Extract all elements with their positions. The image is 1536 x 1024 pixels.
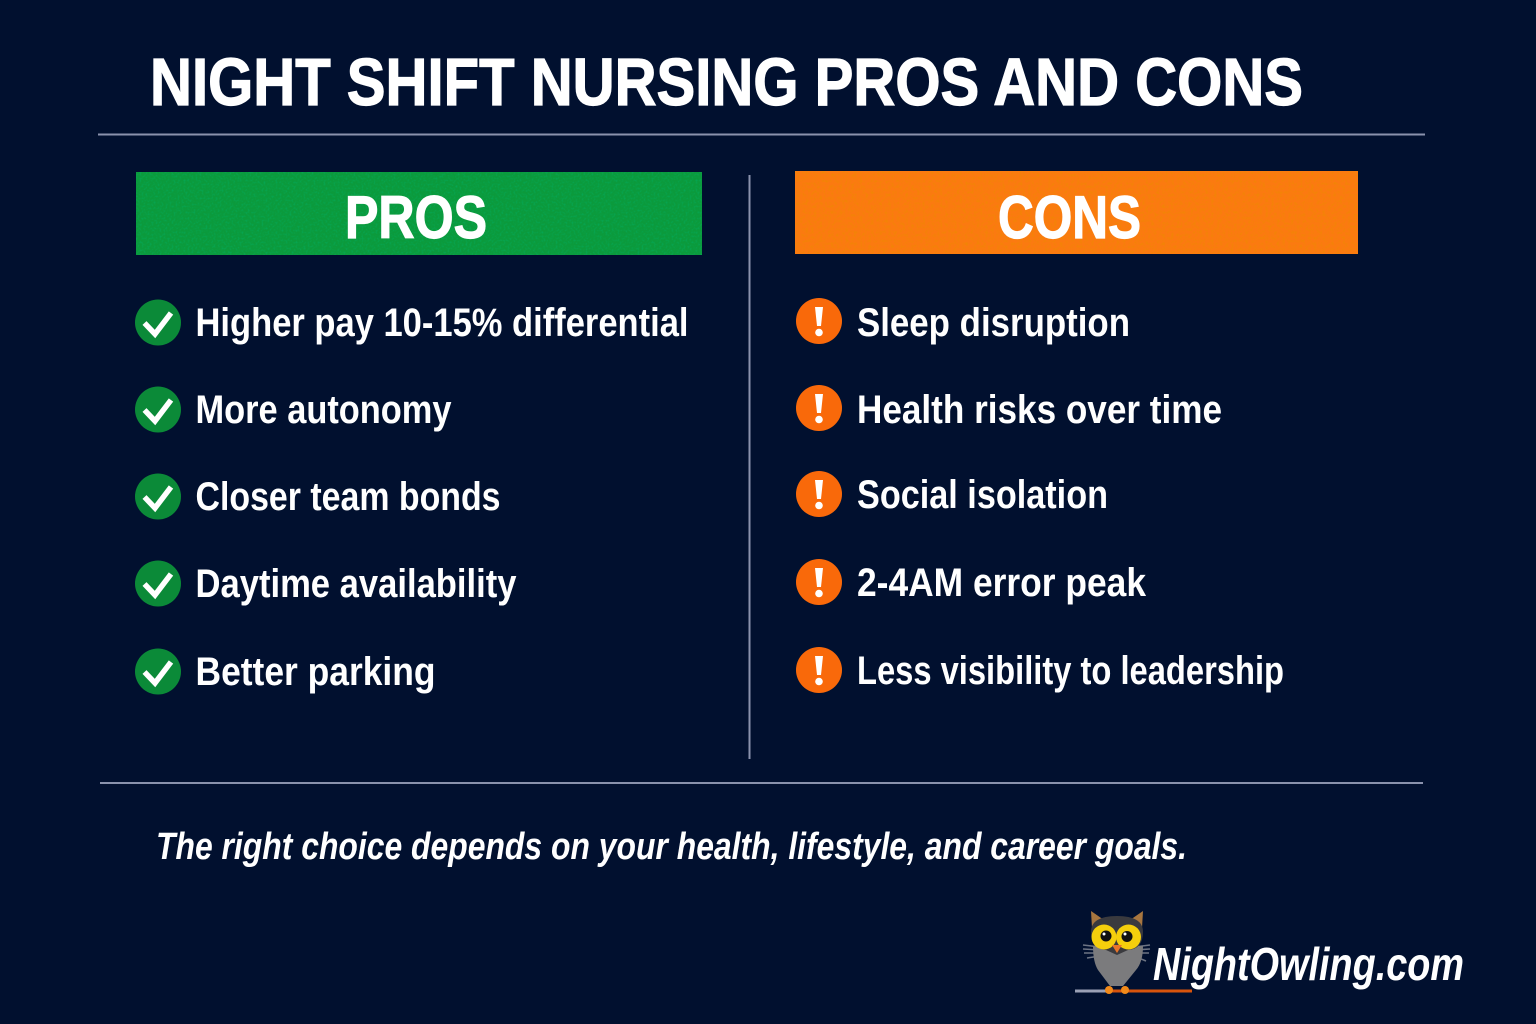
panel: pros <box>135 172 702 694</box>
footer note: The right choice depends on your health, lifestyle, and career goals. <box>156 826 1187 868</box>
con item: social isolation <box>796 471 1108 517</box>
con item: sleep disruption: Sleep disruption <box>857 301 1130 345</box>
cons header <box>795 171 1358 254</box>
logo: NightOwling <box>1075 911 1464 994</box>
con item: error peak: 2-4AM error peak <box>857 561 1147 605</box>
logo: NightOwling: NightOwling.com <box>1153 938 1464 990</box>
pro item: closer team bonds <box>135 474 500 520</box>
pro item: better parking: Better parking <box>196 650 436 694</box>
pro item: higher pay: Higher pay 10-15% differential <box>196 301 688 345</box>
pro item: more autonomy: More autonomy <box>196 388 452 432</box>
title: NIGHT SHIFT NURSING PROS AND CONS <box>150 45 1303 120</box>
con item: sleep disruption <box>796 298 1130 345</box>
pro item: more autonomy <box>135 386 452 432</box>
con item: social isolation: Social isolation <box>857 473 1108 517</box>
cons header: CONS <box>998 184 1141 251</box>
pro item: closer team bonds: Closer team bonds <box>196 475 500 519</box>
con item: less visibility: Less visibility to leadership <box>857 649 1284 693</box>
pro item: better parking <box>135 648 436 694</box>
pros header: PROS <box>345 184 487 251</box>
con item: health risks: Health risks over time <box>857 388 1222 432</box>
icon: owl <box>1075 911 1192 994</box>
pro item: daytime availability: Daytime availability <box>196 562 517 606</box>
panel: cons <box>795 171 1358 693</box>
pros header <box>136 172 702 255</box>
